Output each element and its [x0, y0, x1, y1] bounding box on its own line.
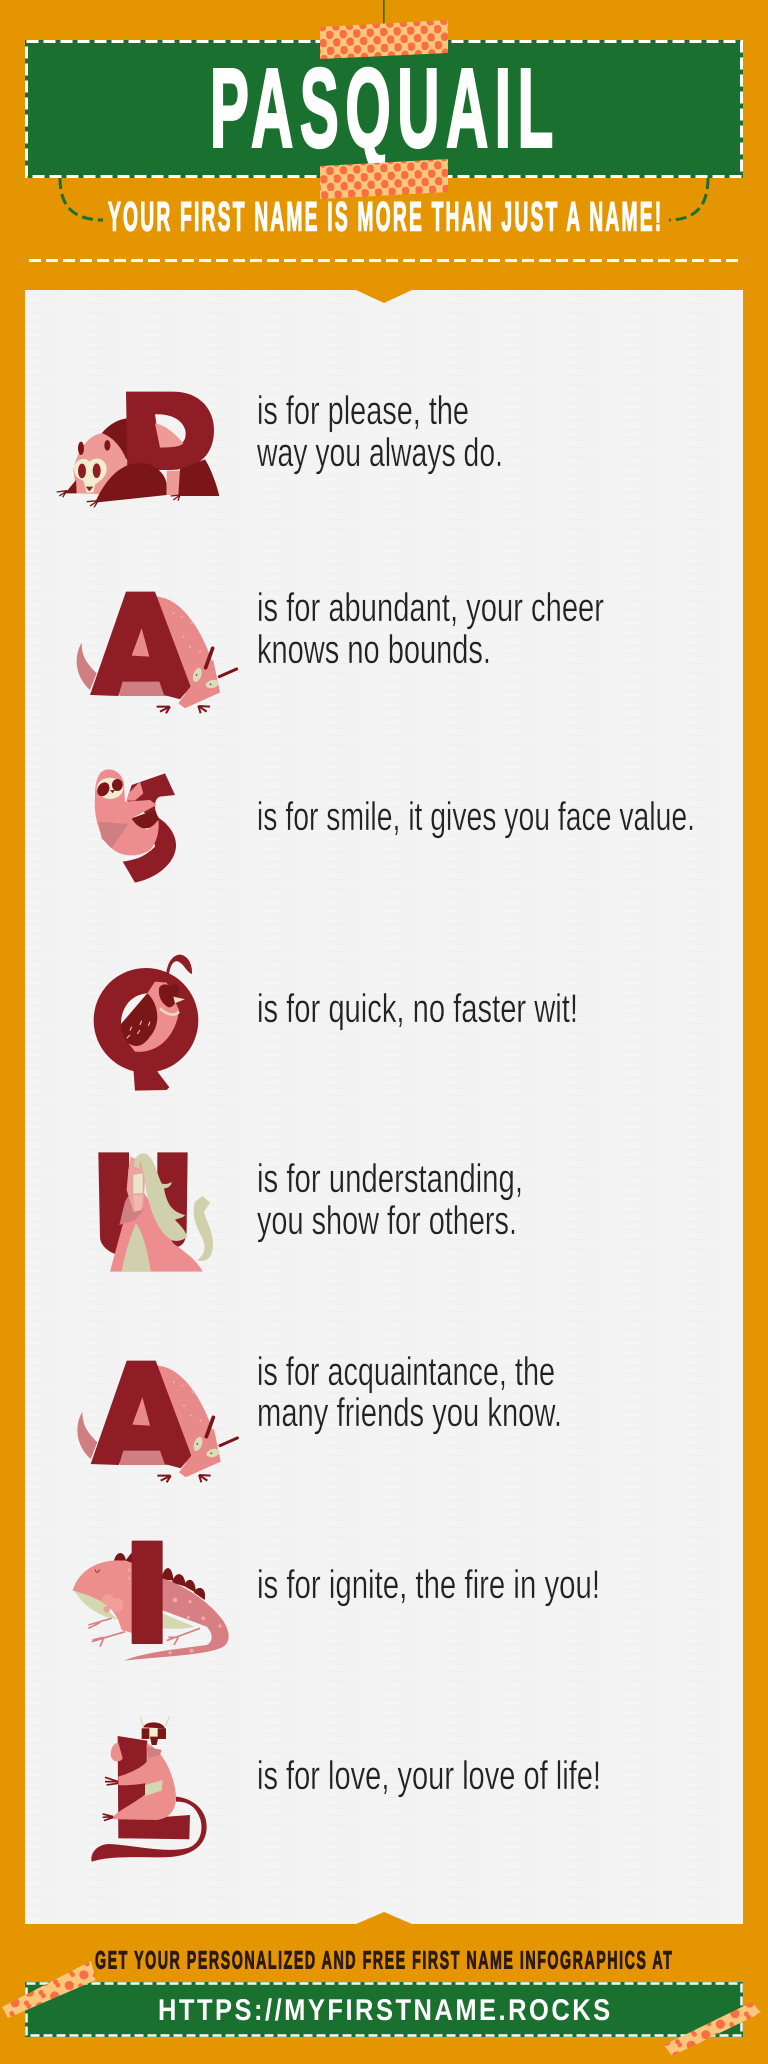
row A second — [77, 1350, 562, 1482]
icon: letter I with iguana — [73, 1541, 229, 1661]
text: A line: knows no bounds. — [257, 628, 491, 672]
thread — [383, 0, 385, 25]
text: U line: is for understanding, — [257, 1157, 523, 1201]
text: P line: way you always do. — [256, 431, 503, 475]
top tape — [320, 20, 448, 59]
footer call to action: GET YOUR PERSONALIZED AND FREE FIRST NAME INFOGRAPHICS AT — [95, 1946, 672, 1974]
icon: letter U with horse — [98, 1152, 213, 1272]
row A — [77, 586, 604, 713]
text: U line: you show for others. — [257, 1199, 517, 1243]
text: P line — [256, 389, 503, 475]
icon: letter S with sloth — [95, 769, 176, 883]
text: Q line: is for quick, no faster wit! — [257, 987, 578, 1031]
header — [25, 0, 743, 260]
title: PASQUAIL — [210, 46, 553, 170]
subtitle: YOUR FIRST NAME IS MORE THAN JUST A NAME! — [108, 194, 661, 240]
icon: letter P with panda — [57, 392, 219, 507]
right green dashed curve — [669, 178, 708, 220]
text: U line — [257, 1157, 523, 1243]
footer — [2, 1946, 761, 2056]
row L — [91, 1717, 601, 1862]
main white panel — [25, 290, 743, 1924]
row S — [95, 769, 695, 883]
icon: letter A with armadillo — [77, 1361, 237, 1482]
text: A line — [257, 586, 604, 672]
text: A line second — [257, 1350, 562, 1435]
icon: letter A with armadillo — [77, 592, 237, 713]
white dashed divider — [29, 259, 739, 262]
bottom notch — [356, 1912, 412, 1924]
right tape — [664, 2002, 761, 2056]
top notch — [356, 290, 412, 303]
icon: letter Q with quail — [94, 955, 198, 1091]
text: I line: is for ignite, the fire in you! — [257, 1563, 600, 1607]
icon: letter L with monkey — [91, 1717, 207, 1862]
row Q — [94, 955, 578, 1091]
left green dashed curve — [60, 178, 103, 220]
row U — [98, 1152, 523, 1272]
row I — [73, 1541, 600, 1661]
footer banner — [25, 1982, 743, 2037]
text: A line: is for abundant, your cheer — [257, 586, 604, 630]
left tape — [2, 1961, 96, 2018]
bottom tape — [320, 159, 448, 199]
title banner — [25, 40, 743, 178]
text: A line second: many friends you know. — [257, 1391, 562, 1435]
text: P line: is for please, the — [257, 389, 469, 433]
footer url: HTTPS://MYFIRSTNAME.ROCKS — [158, 1994, 610, 2027]
text: A line second: is for acquaintance, the — [257, 1350, 555, 1394]
text: L line: is for love, your love of life! — [257, 1754, 601, 1798]
row P — [57, 389, 503, 507]
